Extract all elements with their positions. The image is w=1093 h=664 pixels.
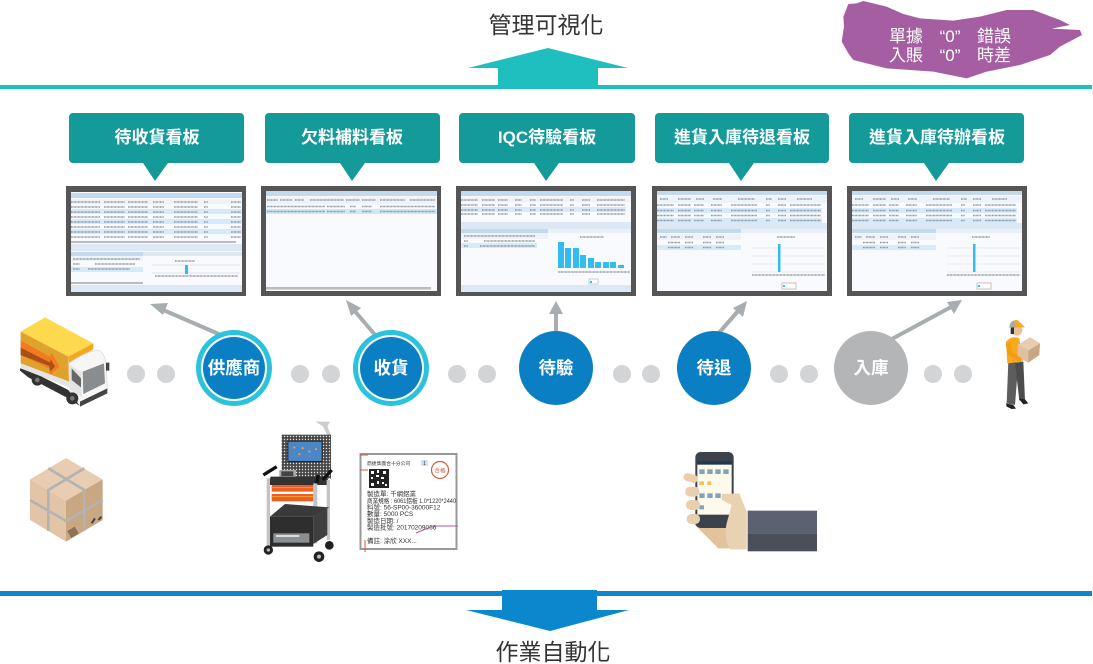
callout: pending receipt board: 待收貨看板: [114, 127, 200, 147]
callout: zero errors brush badge: 單據: [889, 27, 923, 46]
callout: shortage board: [265, 113, 440, 181]
arrow: warehousing to screen 5: [890, 300, 962, 340]
icon: material label: 鼎捷集團合十分公司: [367, 460, 410, 467]
icon: truck: [20, 317, 109, 407]
icon: material label: [360, 454, 458, 552]
arrow: supplier to screen 1: [150, 303, 221, 335]
step: receiving: [353, 330, 429, 406]
icon: material label: 合格: [434, 466, 446, 474]
icon: material label: 1: [423, 461, 426, 467]
step: inspection: 待驗: [538, 358, 574, 378]
callout: return board: 進貨入庫待退看板: [674, 127, 810, 147]
callout: shortage board: 欠料補料看板: [301, 127, 403, 147]
bottom arrow and line: [0, 590, 1092, 631]
top arrow and line: [0, 48, 1092, 89]
screen 4: [652, 186, 832, 296]
icon: mobile workstation cart: [263, 422, 334, 562]
callout: pending receipt board: [69, 113, 244, 181]
callout: warehousing board: 進貨入庫待辦看板: [869, 127, 1005, 147]
step: supplier: 供應商: [208, 358, 260, 378]
step: return: [677, 331, 751, 405]
step: warehousing: [834, 331, 908, 405]
icon: material label: 料號: 56-SP00-36000F12: [367, 502, 441, 512]
callout: IQC board: [459, 113, 635, 181]
callout: return board: [655, 113, 829, 181]
arrow: inspection to screen 3: [549, 301, 563, 334]
callout: IQC board: IQC待驗看板: [498, 127, 596, 147]
top heading: 管理可視化: [488, 12, 604, 38]
screen 1: [66, 186, 246, 296]
callout: zero errors brush badge: 錯誤: [977, 27, 1011, 46]
icon: material label: 製造批號: 20170209066: [367, 522, 437, 532]
callout: zero errors brush badge: [842, 1, 1082, 78]
icon: material label: 製造單: 千網鋁業: [367, 489, 417, 498]
icon: worker carrying box: [1006, 320, 1040, 409]
step: supplier: [196, 330, 272, 406]
icon: material label: 數量: 5000 PCS: [367, 509, 414, 518]
callout: zero errors brush badge: 入賬: [889, 46, 923, 65]
step: warehousing: 入庫: [854, 358, 888, 378]
icon: hand holding phone: [683, 452, 817, 551]
screen 3: [456, 186, 636, 296]
screen 5: [847, 186, 1027, 296]
step: return: 待退: [696, 358, 732, 378]
icon: material label: 製造日期: /: [367, 516, 399, 525]
step: inspection: [519, 331, 593, 405]
callout: zero errors brush badge: “0”: [940, 46, 961, 65]
step: receiving: 收貨: [374, 358, 408, 378]
icon: material label: 備註: 涂欣 XXX...: [367, 536, 417, 545]
icon: cardboard box: [30, 458, 103, 542]
callout: zero errors brush badge: 時差: [977, 46, 1011, 65]
callout: zero errors brush badge: “0”: [940, 27, 961, 46]
callout: warehousing board: [849, 113, 1024, 181]
flow connector dots: [127, 365, 972, 383]
icon: material label: 商業規格 : 6061鋁板 1.0*1220*2440: [367, 496, 456, 505]
screen 2: [261, 186, 441, 296]
arrow: receiving to screen 2: [346, 300, 376, 336]
arrow: return to screen 4: [718, 301, 747, 334]
